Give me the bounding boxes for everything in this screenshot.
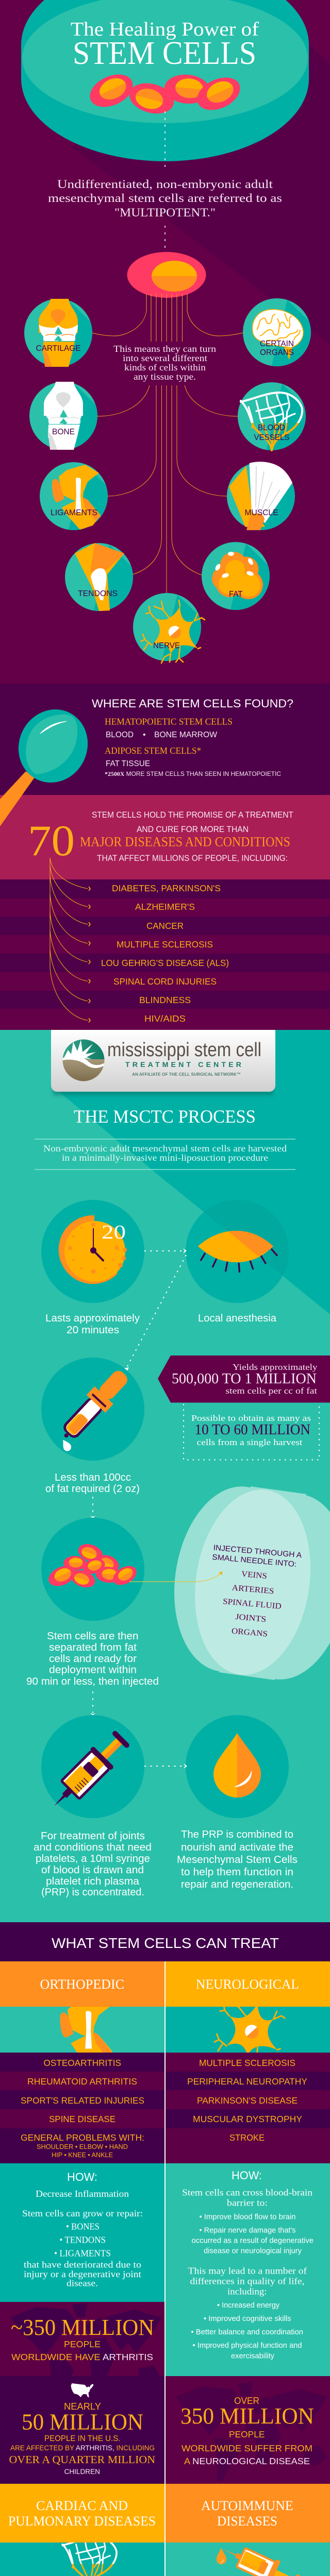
step text: PRP: platelet rich plasma — [46, 1876, 140, 1887]
callout: yield: Yields approximately — [233, 1362, 318, 1372]
multipotent explanation: into several different — [123, 353, 207, 363]
text: 70 major diseases: STEM CELLS HOLD THE PROMISE OF A TREATMENT — [92, 810, 293, 820]
injected into list: SMALL NEEDLE INTO: — [212, 1553, 297, 1569]
multipotent explanation: any tissue type. — [134, 371, 196, 382]
disease list text: HIV/AIDS — [144, 1013, 186, 1024]
panel: orthopedic — [0, 1961, 164, 2067]
text: adipose — [105, 745, 281, 777]
dotted callout: harvest — [184, 1404, 319, 1460]
step text: separation: Stem cells are then — [47, 1631, 138, 1642]
panel: MSCTC process — [0, 1030, 330, 1922]
injected into list: JOINTS — [235, 1613, 267, 1624]
stat: 50 million US arthritis: PEOPLE IN THE U.S. — [44, 2434, 121, 2443]
multipotent explanation: kinds of cells within — [124, 362, 206, 372]
how: neurological: exercisability — [231, 2352, 275, 2361]
injected into list: INJECTED THROUGH A — [213, 1544, 302, 1560]
panel: autoimmune: AUTOIMMUNE — [201, 2498, 293, 2513]
panel: cardiac and pulmonary: PULMONARY DISEASES — [8, 2514, 156, 2529]
step text: separation: deployment within — [49, 1664, 137, 1675]
arrows to disease list — [50, 858, 90, 1022]
injected into list: VEINS — [241, 1570, 268, 1581]
stat: 50 million US arthritis: CHILDREN — [64, 2468, 100, 2476]
circle: blood vessels — [238, 382, 306, 450]
intro text — [48, 178, 282, 219]
neurological conditions list: MULTIPLE SCLEROSIS — [199, 2058, 295, 2068]
petri dish — [21, 0, 309, 161]
step text: local anesthesia: Local anesthesia — [198, 1313, 277, 1324]
text: hematopoietic: HEMATOPOIETIC STEM CELLS — [105, 716, 233, 726]
disease list stripes — [0, 879, 330, 1030]
panel: cardiac and pulmonary: CARDIAC AND — [36, 2498, 128, 2513]
orthopedic conditions list: SHOULDER • ELBOW • HAND — [37, 2143, 128, 2150]
circle: bone — [29, 382, 97, 450]
disease list text: SPINAL CORD INJURIES — [113, 976, 217, 987]
how: orthopedic: • LIGAMENTS — [54, 2248, 111, 2259]
how: neurological: • Improved cognitive skills — [204, 2315, 291, 2323]
arrow: syringe to drop — [144, 1764, 187, 1769]
callout: yield: stem cells per cc of fat — [226, 1386, 317, 1396]
title: STEM CELLS — [73, 35, 256, 71]
text: hematopoietic: BLOOD — [106, 731, 134, 739]
intro text: Undifferentiated, non-embryonic adult — [57, 178, 273, 191]
step text: combined: nourish and activate the — [181, 1842, 293, 1853]
arrow: cells to syringe — [90, 1691, 95, 1716]
heading: where are stem cells found: WHERE ARE STEM CELLS FOUND? — [92, 697, 293, 710]
injected into list: ARTERIES — [232, 1583, 274, 1596]
text: hematopoietic: BONE MARROW — [154, 731, 218, 739]
arrow: cells to injection — [129, 1571, 223, 1582]
diagonal long shadow — [72, 45, 330, 344]
panel: autoimmune: DISEASES — [217, 2514, 277, 2529]
logo card: AN AFFILIATE OF THE CELL SURGICAL NETWORK™ — [132, 1072, 241, 1077]
how: neurological: • Improved physical function and — [193, 2342, 302, 2350]
orthopedic conditions list: SPORT'S RELATED INJURIES — [21, 2095, 144, 2106]
circle: tendons — [65, 543, 133, 611]
intro text: mesenchymal stem cells are referred to as — [48, 192, 282, 205]
step: dropper — [41, 1358, 144, 1461]
how: neurological: • Better balance and coordination — [191, 2328, 303, 2336]
circle: muscle — [227, 462, 295, 530]
text: 70 major diseases — [28, 810, 293, 865]
single stem cell — [127, 252, 206, 298]
process intro text: Non-embryonic adult mesenchymal stem cells are harvested — [43, 1143, 287, 1154]
injection disc — [162, 1478, 330, 1688]
icon: magnifying glass — [0, 698, 100, 826]
stat: 350 million neurological: 350 MILLION — [180, 2403, 314, 2429]
disease list text: MULTIPLE SCLEROSIS — [117, 939, 213, 950]
stat: 50 million US arthritis: OVER A QUARTER MILLION — [9, 2453, 155, 2466]
differentiation lines — [92, 294, 243, 593]
injected into list: ORGANS — [231, 1626, 268, 1639]
intro text: "MULTIPOTENT." — [114, 206, 216, 219]
step text: PRP: of blood is drawn and — [41, 1865, 144, 1876]
step text: combined — [177, 1829, 298, 1890]
disease list text: ALZHEIMER'S — [135, 902, 195, 912]
panel: where stem cells are found — [0, 684, 330, 795]
arrow: clock to eye — [144, 1248, 187, 1253]
arrow: dropper to cells — [90, 1497, 95, 1518]
step text: PRP — [34, 1831, 152, 1898]
panel: neurological — [166, 1961, 330, 2066]
text: adipose: ADIPOSE STEM CELLS* — [105, 745, 201, 756]
circle: blood vessels: BLOOD — [258, 423, 285, 432]
step text: separation: cells and ready for — [49, 1653, 137, 1665]
step: clock — [41, 1200, 144, 1303]
circle: blood vessels: VESSELS — [254, 433, 290, 442]
how: neurological: occurred as a result of degenerative — [192, 2237, 314, 2245]
callout: yield: 500,000 TO 1 MILLION — [172, 1371, 317, 1387]
text: hematopoietic: • — [143, 731, 146, 739]
circle: nerve: NERVE — [153, 641, 180, 650]
multipotent explanation — [113, 344, 216, 382]
step text: less than 100cc: Less than 100cc — [55, 1472, 131, 1483]
how: neurological: including: — [227, 2286, 267, 2297]
how: orthopedic: Stem cells can grow or repair: — [22, 2208, 143, 2218]
disease list text: LOU GEHRIG'S DISEASE (ALS) — [101, 958, 229, 968]
title: The Healing Power of — [71, 19, 259, 40]
heading band: what stem cells can treat: WHAT STEM CELLS CAN TREAT — [52, 1935, 279, 1951]
circle: ligaments — [40, 462, 108, 530]
circle: certain organs: CERTAIN — [260, 340, 294, 348]
stat: 350 million neurological: A NEUROLOGICAL DISEASE — [184, 2456, 310, 2466]
orthopedic conditions list: GENERAL PROBLEMS WITH: — [21, 2132, 144, 2143]
title — [71, 19, 259, 71]
process intro text — [43, 1143, 287, 1163]
panel: autoimmune — [166, 2484, 330, 2576]
text: adipose: *2500X MORE STEM CELLS THAN SEEN IN HEMATOPOIETIC — [105, 770, 281, 777]
stat: 350 million arthritis — [0, 2302, 164, 2402]
neurological conditions list: MUSCULAR DYSTROPHY — [193, 2114, 302, 2124]
panel: 70 major diseases — [0, 795, 330, 879]
orthopedic conditions list: RHEUMATOID ARTHRITIS — [27, 2076, 137, 2087]
step text: less than 100cc: of fat required (2 oz) — [45, 1483, 140, 1495]
disease list text: BLINDNESS — [139, 995, 191, 1005]
orthopedic conditions list: SPINE DISEASE — [49, 2114, 116, 2124]
stat: 350 million neurological — [166, 2376, 330, 2484]
step text: PRP: For treatment of joints — [41, 1831, 145, 1842]
panel: neurological: NEUROLOGICAL — [196, 1977, 299, 1992]
step text: separation: 90 min or less, then injected — [26, 1676, 159, 1687]
circle: cartilage: CARTILAGE — [36, 344, 80, 353]
how: neurological: • Improve blood flow to brain — [199, 2213, 296, 2222]
neurological conditions list: STROKE — [229, 2132, 265, 2143]
neurological conditions list — [166, 2053, 330, 2163]
how: orthopedic: injury or a degenerative joint — [24, 2269, 141, 2279]
neurological conditions list: PERIPHERAL NEUROPATHY — [187, 2076, 307, 2087]
multipotent explanation: This means they can turn — [113, 344, 216, 354]
stat: 350 million neurological: OVER — [234, 2396, 259, 2406]
dotted callout: harvest: cells from a single harvest — [197, 1437, 303, 1447]
how: orthopedic: • BONES — [66, 2222, 100, 2232]
dotted connector — [164, 111, 166, 252]
step text: 20 minutes — [45, 1313, 140, 1336]
callout: yield — [158, 1355, 330, 1402]
orthopedic conditions list: OSTEOARTHRITIS — [43, 2058, 121, 2068]
how: orthopedic: Decrease Inflammation — [36, 2189, 129, 2199]
text: 70 major diseases: 70 — [28, 817, 75, 865]
stat: 350 million arthritis: ~350 MILLION — [11, 2315, 154, 2340]
how: neurological: • Increased energy — [217, 2301, 280, 2310]
stat: 350 million arthritis: WORLDWIDE HAVE ARTHRITIS — [11, 2352, 153, 2362]
how: neurological: barrier to: — [227, 2198, 268, 2208]
circle: ligaments: LIGAMENTS — [51, 509, 97, 517]
circle: cartilage — [24, 299, 92, 367]
process intro text: in a minimally-invasive mini-liposuction procedure — [62, 1153, 268, 1163]
long shadow in process panel — [57, 1030, 330, 1314]
stat: 350 million neurological: WORLDWIDE SUFFER FROM — [182, 2443, 312, 2453]
how: neurological — [166, 2163, 330, 2376]
dotted callout: harvest: 10 TO 60 MILLION — [195, 1422, 310, 1438]
heading band: what stem cells can treat — [0, 1922, 330, 1961]
arrow: eye to dropper — [124, 1255, 186, 1371]
step text: PRP: (PRP) is concentrated. — [41, 1887, 144, 1898]
orthopedic conditions list — [0, 2053, 164, 2163]
step text: PRP: and conditions that need — [34, 1842, 152, 1853]
step text: combined: Mesenchymal Stem Cells — [177, 1854, 298, 1866]
circle: muscle: MUSCLE — [244, 509, 278, 517]
step: clock: 20 — [102, 1222, 126, 1243]
circle: tendons: TENDONS — [78, 589, 118, 598]
injected into list: SPINAL FLUID — [222, 1597, 282, 1611]
how: orthopedic: that have deteriorated due to — [24, 2260, 141, 2270]
how: neurological: disease or neurological injury — [204, 2247, 302, 2256]
stat: 50 million US arthritis: NEARLY — [64, 2401, 101, 2412]
step text: PRP: platelets, a 10ml syringe — [36, 1853, 150, 1865]
step: syringe — [41, 1715, 144, 1818]
neurological conditions list: PARKINSON'S DISEASE — [197, 2095, 298, 2106]
dotted callout: harvest: Possible to obtain as many as — [191, 1413, 311, 1423]
stat: 350 million arthritis: PEOPLE — [64, 2339, 101, 2349]
step text: combined: The PRP is combined to — [181, 1829, 293, 1840]
step text: combined: repair and regeneration. — [181, 1879, 293, 1890]
logo card: mississippi stem cell — [107, 1039, 261, 1061]
logo card — [51, 1030, 275, 1095]
heading: the MSCTC process: THE MSCTC PROCESS — [74, 1106, 256, 1127]
stat: 350 million neurological: PEOPLE — [229, 2429, 265, 2439]
step text: combined: to help them function in — [181, 1867, 293, 1878]
text: 70 major diseases: THAT AFFECT MILLIONS OF PEOPLE, INCLUDING: — [97, 854, 288, 863]
step text: less than 100cc — [45, 1472, 140, 1495]
text: hematopoietic — [105, 716, 233, 739]
circle: nerve — [133, 593, 205, 663]
disease list text: CANCER — [146, 921, 184, 931]
stat: 50 million US arthritis — [0, 2376, 164, 2484]
step text: 20 minutes: 20 minutes — [67, 1325, 119, 1336]
injected into list — [212, 1544, 302, 1639]
how: orthopedic: HOW: — [67, 2171, 97, 2183]
how: neurological: differences in quality of life, — [190, 2276, 304, 2286]
stat: 50 million US arthritis: ARE AFFECTED BY ARTHRITIS, INCLUDING — [10, 2444, 155, 2452]
logo card: TREATMENT CENTER — [125, 1060, 244, 1069]
panel: orthopedic: ORTHOPEDIC — [40, 1977, 124, 1992]
stem cells on dish — [85, 68, 245, 118]
step: platelet drop — [186, 1715, 289, 1818]
orthopedic conditions list: HIP • KNEE • ANKLE — [52, 2151, 113, 2159]
circle: certain organs: ORGANS — [260, 348, 294, 357]
how: orthopedic: • TENDONS — [60, 2235, 106, 2245]
circle: bone: BONE — [52, 428, 75, 436]
how: orthopedic: disease. — [67, 2278, 98, 2289]
how: neurological: This may lead to a number of — [188, 2266, 307, 2276]
step text: separation: separated from fat — [49, 1642, 137, 1653]
disease list text: DIABETES, PARKINSON'S — [112, 883, 221, 893]
step: separated cells — [41, 1518, 144, 1621]
text: 70 major diseases: MAJOR DISEASES AND CONDITIONS — [80, 835, 290, 849]
panel: cardiac and pulmonary — [0, 2484, 164, 2576]
text: adipose: FAT TISSUE — [106, 759, 150, 768]
disease list text — [101, 883, 229, 1024]
step text: separation — [26, 1631, 159, 1687]
how: neurological: • Repair nerve damage that's — [199, 2227, 296, 2235]
how: neurological: Stem cells can cross blood-brain — [182, 2188, 312, 2198]
stat: 50 million US arthritis: 50 MILLION — [22, 2409, 143, 2435]
text: 70 major diseases: AND CURE FOR MORE THAN — [137, 825, 249, 834]
how: orthopedic — [0, 2163, 164, 2302]
circle: certain organs — [243, 298, 311, 366]
circle: fat — [202, 542, 270, 610]
circle: fat: FAT — [229, 590, 243, 599]
step text: 20 minutes: Lasts approximately — [45, 1313, 140, 1324]
step: eye — [186, 1200, 289, 1303]
how: neurological: HOW: — [232, 2169, 262, 2182]
